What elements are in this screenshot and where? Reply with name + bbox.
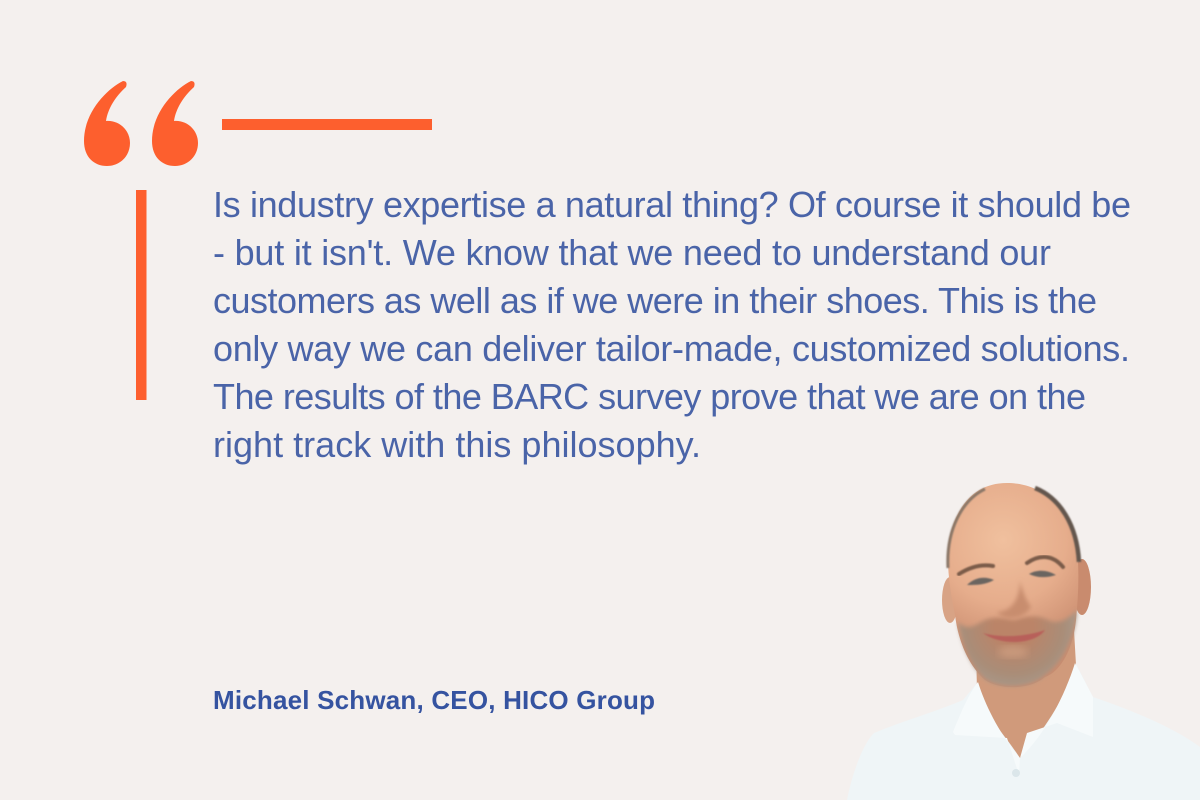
quote text: right track with this philosophy. — [213, 424, 701, 465]
ears — [942, 577, 958, 623]
quote text: - but it isn't. We know that we need to understand our — [213, 232, 1051, 273]
beard — [958, 610, 1077, 686]
head — [948, 483, 1078, 687]
neck — [976, 630, 1076, 758]
eyes — [967, 571, 1056, 585]
quote text: only way we can deliver tailor-made, customized solutions. — [213, 328, 1130, 369]
hair edge — [948, 489, 985, 568]
quote text: The results of the BARC survey prove that we are on the — [213, 376, 1086, 417]
attribution: Michael Schwan, CEO, HICO Group — [213, 685, 655, 715]
shirt button — [1012, 769, 1020, 777]
portrait: Michael Schwan — [847, 483, 1200, 800]
quote text — [213, 184, 1131, 465]
horizontal accent bar — [222, 119, 432, 130]
icon: opening quotation marks — [84, 81, 198, 166]
shirt — [847, 662, 1200, 800]
mouth — [983, 630, 1045, 642]
vertical accent bar — [136, 190, 146, 400]
collar — [953, 663, 1093, 775]
chin patch — [998, 646, 1028, 658]
eyebrows — [959, 557, 1063, 574]
nose shadow — [997, 580, 1031, 618]
quote text: Is industry expertise a natural thing? Of course it should be — [213, 184, 1131, 225]
quote text: customers as well as if we were in their shoes. This is the — [213, 280, 1097, 321]
